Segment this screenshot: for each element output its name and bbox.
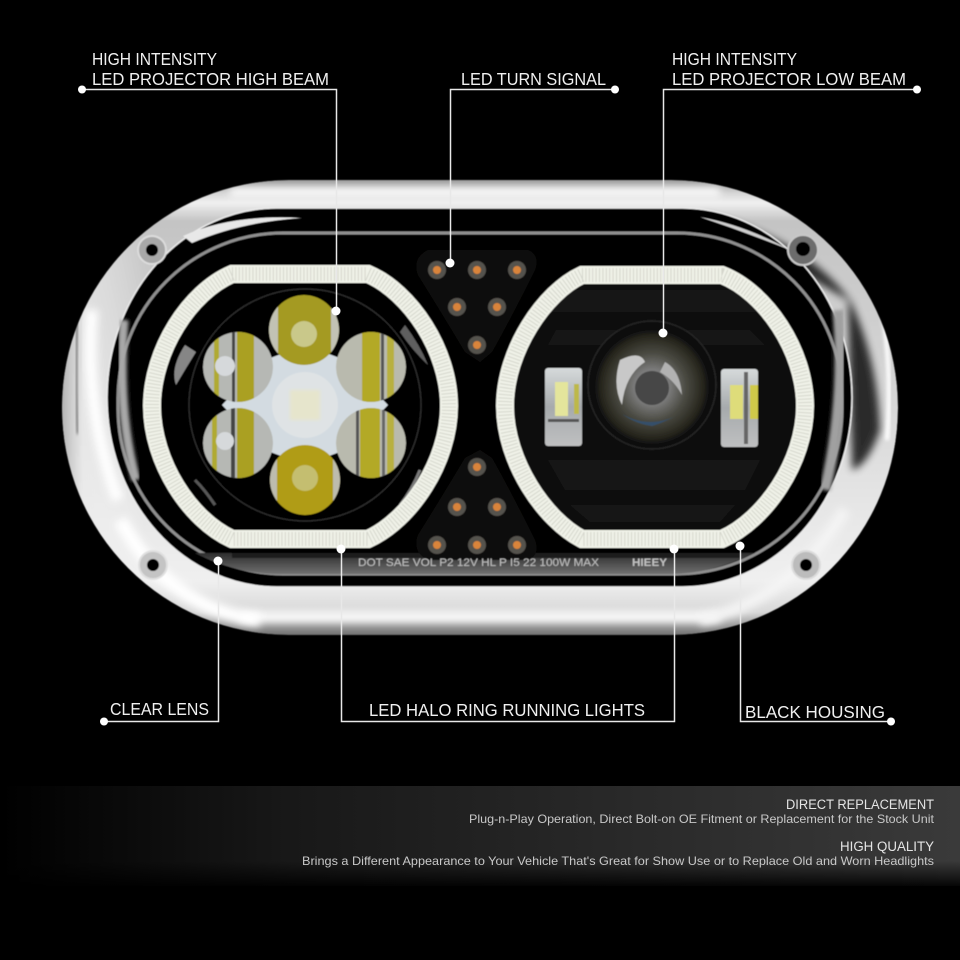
callout: clear lens: CLEAR LENS <box>110 699 209 719</box>
lens markings: HIEEY <box>632 557 668 569</box>
lens: lower left <box>203 408 273 478</box>
callout: low beam: HIGH INTENSITY <box>672 49 797 69</box>
callout: black housing: BLACK HOUSING <box>745 702 885 722</box>
lens: upper right <box>336 332 406 402</box>
turn signal panels <box>416 250 536 560</box>
mounting screws <box>138 235 820 579</box>
lens: lower right <box>336 408 406 478</box>
white reflector centre <box>222 345 388 465</box>
callout: high beam: LED PROJECTOR HIGH BEAM <box>92 69 329 89</box>
left LED block <box>545 368 582 446</box>
callout: high beam: HIGH INTENSITY <box>92 49 217 69</box>
lens markings: DOT SAE VOL P2 12V HL P I5 22 100W MAX <box>358 557 600 569</box>
callout: high beam <box>78 49 340 316</box>
callout: turn signal <box>446 69 619 268</box>
callout: black housing <box>736 542 895 726</box>
centre LED <box>272 372 338 438</box>
lens: top <box>269 295 340 365</box>
callout: low beam <box>658 49 921 338</box>
callout: clear lens <box>100 556 222 726</box>
left halo ring <box>152 274 449 539</box>
clear lens ring <box>118 233 842 574</box>
left high beam module <box>152 274 449 539</box>
lens: bottom <box>270 445 340 515</box>
lens: upper left <box>203 332 273 402</box>
chrome bezel <box>62 180 898 635</box>
feature: high quality <box>302 839 934 868</box>
feature band <box>0 786 960 886</box>
callout: low beam: LED PROJECTOR LOW BEAM <box>672 69 906 89</box>
feature: direct replacement: DIRECT REPLACEMENT <box>786 797 934 812</box>
right low beam module <box>505 275 805 539</box>
callout: halo ring <box>336 544 678 722</box>
right LED block <box>721 369 758 447</box>
callout: halo ring: LED HALO RING RUNNING LIGHTS <box>369 700 645 720</box>
feature: direct replacement <box>469 797 935 826</box>
headlight assembly <box>62 180 898 635</box>
black inner housing <box>107 208 852 587</box>
right halo ring <box>505 275 805 539</box>
feature: direct replacement: Plug-n-Play Operation, Direct Bolt-on OE Fitment or Replacement for the Stock Unit <box>469 812 935 826</box>
feature: high quality: Brings a Different Appearance to Your Vehicle That's Great for Show Use or to Replace Old and Worn Headlights <box>302 854 934 868</box>
projector lens <box>588 321 716 449</box>
feature: high quality: HIGH QUALITY <box>840 839 934 854</box>
callout: turn signal: LED TURN SIGNAL <box>461 69 606 89</box>
